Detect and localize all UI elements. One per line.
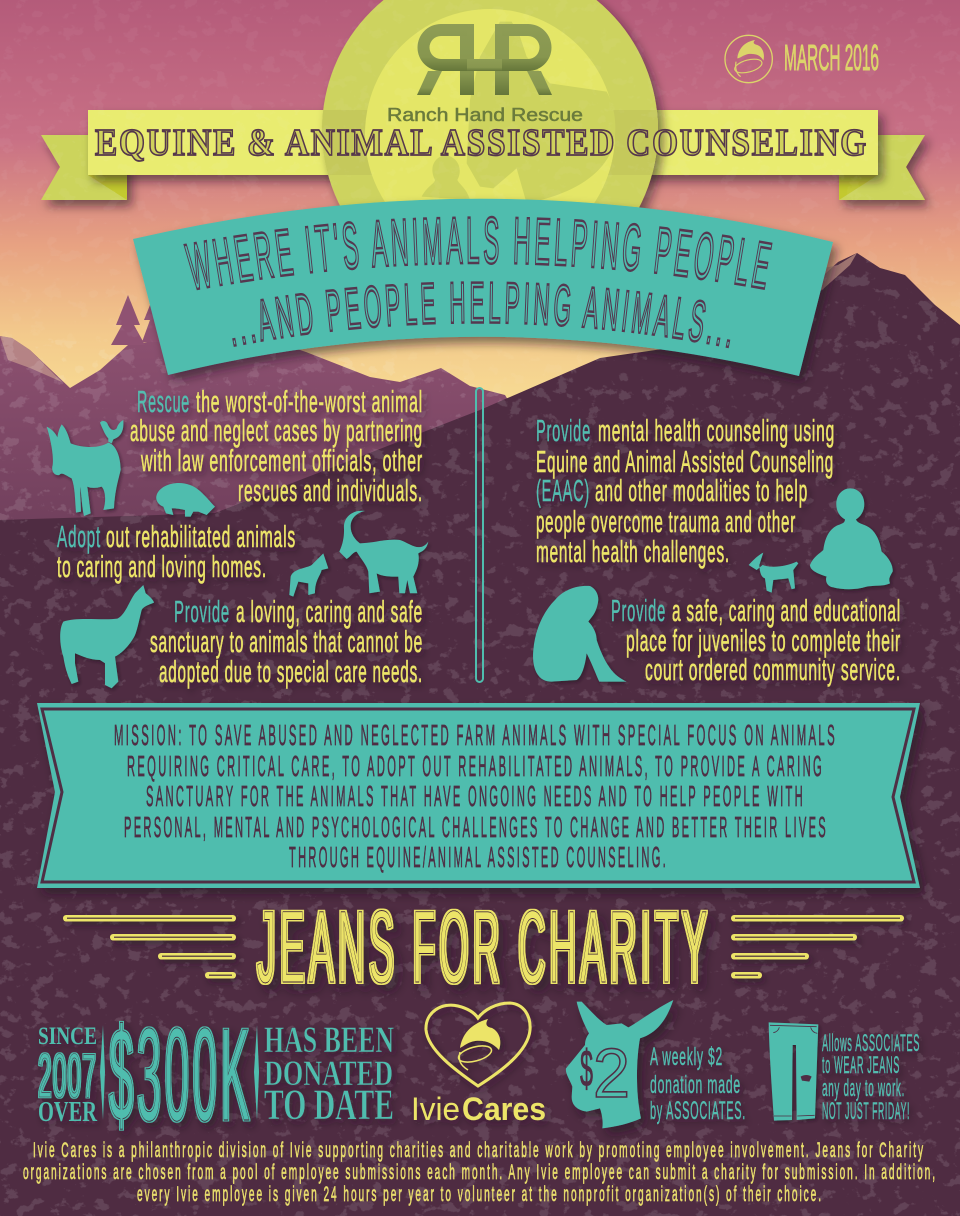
- stat: since 2007 over $300K: [38, 1001, 394, 1148]
- text block: weekly donation: [650, 1043, 746, 1125]
- icons: right column figures: [533, 488, 893, 682]
- slogan text: ...AND PEOPLE HELPING ANIMALS...: [232, 281, 730, 348]
- text block: adopt: out rehabilitated animals: [106, 519, 296, 554]
- text block: provide counseling: (EAAC): [536, 473, 590, 508]
- icon: small goat: [749, 553, 798, 593]
- text block: provide community service: Provide: [611, 593, 666, 628]
- text block: provide sanctuary: [150, 594, 423, 689]
- text block: provide counseling: Provide: [536, 413, 591, 448]
- stat: since 2007 over $300K: SINCE: [38, 1023, 97, 1050]
- text block: rescue: with law enforcement officials, other: [140, 443, 423, 478]
- logo: mirrored RR: [417, 24, 552, 95]
- text block: adopt: Adopt: [57, 519, 101, 554]
- mauve mountains: [0, 320, 540, 560]
- text: by ASSOCIATES.: [650, 1097, 746, 1125]
- text block: weekly donation: donation made: [650, 1071, 741, 1099]
- text block: jeans rules: [822, 1030, 920, 1125]
- icons: left column animals: [47, 420, 428, 688]
- icon: donkey head with $2: 2: [593, 1034, 630, 1112]
- text block: rescue: the worst-of-the-worst animal: [196, 384, 423, 419]
- title: EQUINE & ANIMAL ASSISTED COUNSELING: [95, 122, 868, 164]
- stat: since 2007 over $300K: HAS BEEN: [264, 1020, 394, 1061]
- icon: foal: [289, 553, 328, 597]
- decorative speed lines: right: [731, 915, 904, 978]
- text block: provide sanctuary: sanctuary to animals that cannot be: [150, 624, 423, 659]
- ribbon: yellow title banner: [41, 110, 925, 200]
- wordmark: Ivie: [411, 1091, 460, 1127]
- text block: provide counseling: [536, 413, 835, 569]
- stat: since 2007 over $300K: TO DATE: [264, 1082, 394, 1129]
- text: a loving, caring and safe: [236, 594, 423, 629]
- icon: jeans: [769, 1022, 818, 1121]
- dark foreground mountain: [0, 253, 960, 1216]
- text block: ivie cares description: [23, 1139, 937, 1206]
- mission text: [114, 720, 837, 874]
- icon: goat: [339, 511, 428, 593]
- text block: rescue: Rescue: [137, 384, 190, 419]
- background sky: [0, 0, 960, 420]
- icon: llama: [60, 585, 154, 688]
- background grunge texture: mountains: [0, 260, 960, 1216]
- date badge: [725, 35, 879, 83]
- icon: donkey head with $2: $: [580, 1040, 593, 1098]
- text block: provide community service: [611, 593, 901, 687]
- text block: adopt: to caring and loving homes.: [57, 549, 267, 584]
- teal curved slogan banner: [132, 198, 844, 386]
- icon: pig: [156, 483, 215, 517]
- icon: sitting girl: [533, 586, 627, 682]
- slogan text: [183, 216, 772, 348]
- stat: since 2007 over $300K: OVER: [38, 1097, 98, 1128]
- text: adopted due to special care needs.: [159, 654, 423, 689]
- icon: pine trees: [111, 290, 172, 345]
- text block: rescue: rescues and individuals.: [238, 473, 423, 508]
- icon: donkey head with $2: [566, 1000, 673, 1128]
- panel: mission banner: [37, 703, 920, 888]
- text block: provide sanctuary: Provide: [174, 594, 230, 629]
- text block: weekly donation: A weekly $2: [650, 1043, 723, 1071]
- text block: rescue: [130, 384, 423, 508]
- logo: Ivie Cares heart: [411, 1003, 546, 1127]
- stat: since 2007 over $300K: DONATED: [264, 1053, 393, 1093]
- icon: seated child: [810, 488, 893, 589]
- text block: provide counseling: mental health challenges.: [536, 534, 730, 569]
- decorative speed lines: left: [63, 915, 236, 978]
- text: abuse and neglect cases by partnering: [130, 413, 423, 448]
- slogan text: WHERE IT'S ANIMALS HELPING PEOPLE: [183, 216, 772, 290]
- logo name: Ranch Hand Rescue: [387, 105, 583, 125]
- icon: chicken: [100, 420, 123, 443]
- stat: since 2007 over $300K: 2007: [38, 1042, 97, 1111]
- stat: since 2007 over $300K: $300K: [109, 1001, 253, 1148]
- moon with horse and person silhouette: [320, 0, 670, 209]
- center divider: [476, 388, 483, 682]
- logo: Ivie Cares heart: Cares: [462, 1091, 546, 1127]
- icon: donkey: [47, 424, 121, 516]
- text block: adopt: [57, 519, 296, 584]
- icon: Ivie swoosh badge: [725, 35, 772, 83]
- ribbon tails: [41, 135, 925, 200]
